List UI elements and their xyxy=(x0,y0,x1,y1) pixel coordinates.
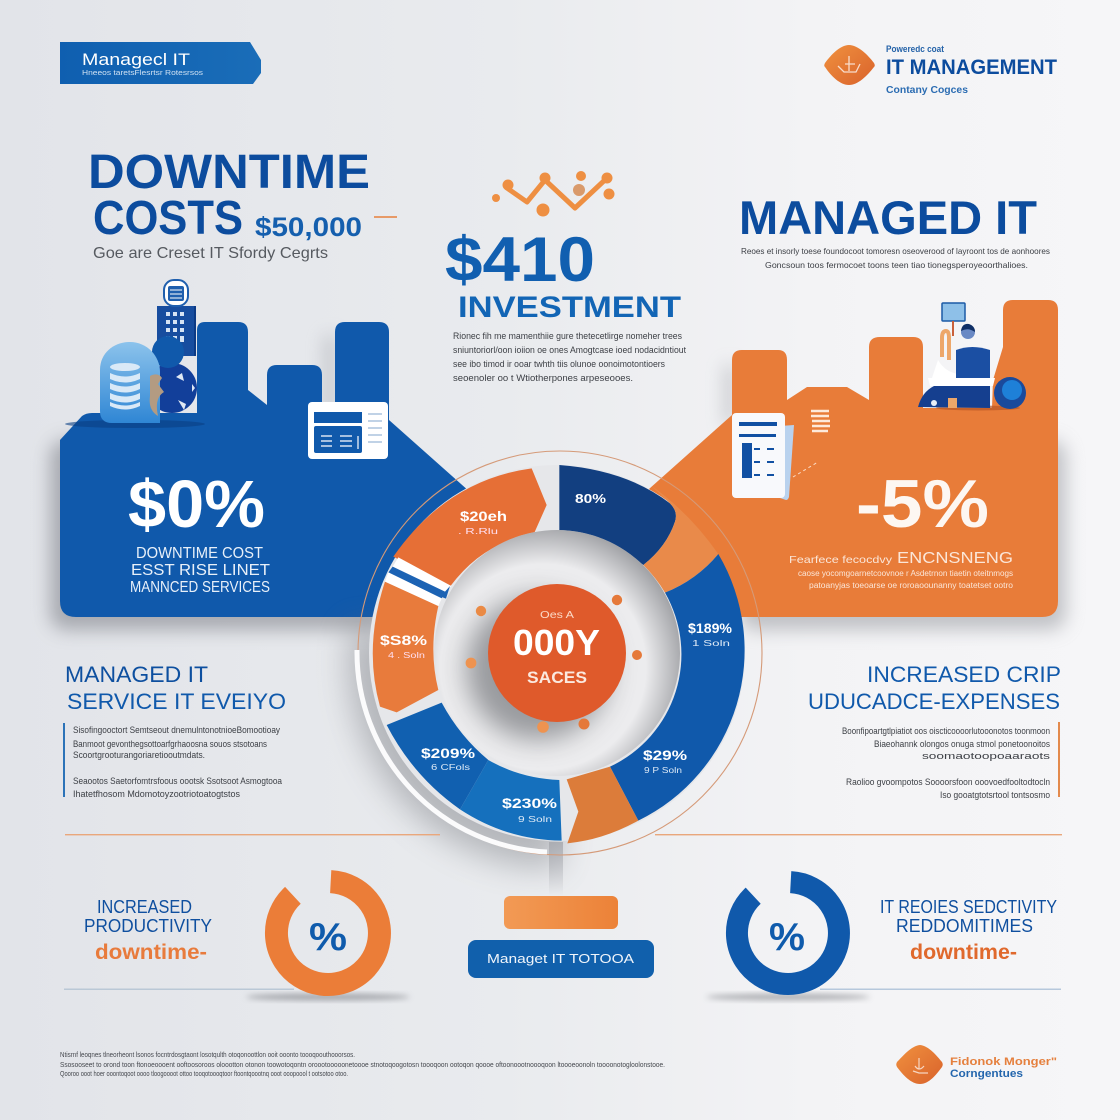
icon: database dome and globe xyxy=(65,336,205,428)
icon: person at laptop xyxy=(918,303,1026,410)
section: managed IT service: MANAGED IT xyxy=(65,662,208,687)
section: increased expenses: Biaeohannk olongos onuga stmol ponetoonoitos xyxy=(874,739,1050,749)
panel caption: caose yocomgoarnetcoovnoe r Asdetrnon tiaetin oteitnmogs xyxy=(798,569,1013,578)
panel caption: ESST RISE LINET xyxy=(131,562,271,579)
section: managed IT service: SERVICE IT EVEIYO xyxy=(67,689,286,714)
header tag: Managecl IT xyxy=(82,50,190,69)
ring gauge orange xyxy=(276,882,379,985)
segment labels: $230% xyxy=(502,796,557,811)
logo: IT management: Poweredc coat xyxy=(886,44,945,55)
segment labels: 80% xyxy=(575,491,607,506)
segment labels: 4 . Soln xyxy=(388,651,425,660)
panel caption xyxy=(130,545,271,596)
segment: blue bottom-left xyxy=(387,703,488,809)
section: managed IT service xyxy=(63,662,286,799)
stat: IT reduces downtime xyxy=(706,882,1061,1000)
percent symbol: % xyxy=(769,916,805,959)
panel shadows xyxy=(50,335,1066,630)
heading: investment: seoenoler oo t Wtiotherpones arpeseooes. xyxy=(453,373,633,383)
heading: investment: INVESTMENT xyxy=(458,291,681,324)
panel: downtime cost xyxy=(60,322,470,617)
donut chart xyxy=(357,451,762,855)
vertical drop shadow xyxy=(549,842,563,896)
white arc xyxy=(357,650,547,852)
icon: striped band xyxy=(385,557,451,606)
segment labels: 9 Soln xyxy=(518,815,552,824)
heading: investment: Rionec fih me mamenthiie gure thetecetlirge nomeher trees xyxy=(453,331,682,341)
stat: increased productivity: PRODUCTIVITY xyxy=(84,916,212,936)
section: managed IT service: Banmoot gevonthegsottoarfgrhaoosna souos stsotoans xyxy=(73,739,267,749)
logo: IT management: Contany Cogces xyxy=(886,85,968,96)
segment: orange top-left xyxy=(393,468,547,587)
panel caption xyxy=(789,550,1014,590)
segment: orange bottom xyxy=(567,767,638,843)
heading: investment xyxy=(445,225,686,383)
inner disc xyxy=(434,530,680,776)
orange button xyxy=(504,896,618,929)
segment labels: 9 P Soln xyxy=(644,766,682,775)
heading: managed IT xyxy=(739,191,1050,270)
segment labels: $209% xyxy=(421,746,475,761)
heading: investment: see ibo timod ir ooar twhth tiis olunoe oonoimotontioers xyxy=(453,359,665,369)
heading: managed IT: Reoes et insorly toese foundocoot tomoresn oseoverood of layroont tos de aonhoores xyxy=(741,246,1050,256)
segment labels: $189% xyxy=(688,621,732,636)
section: managed IT service: Sisofingooctort Semtseout dnemulntonotnioeBomootioay xyxy=(73,725,280,735)
stat: IT reduces downtime: IT REOIES SEDCTIVITY xyxy=(880,897,1057,917)
donut base disc xyxy=(369,465,745,841)
heading: downtime costs xyxy=(88,146,397,262)
logo: bottom right: Corngentues xyxy=(950,1068,1023,1080)
segment: blue right xyxy=(610,554,745,821)
stat: IT reduces downtime: downtime- xyxy=(910,941,1017,964)
footnote: Qooroo ooot hoer ooontoqoot oooo tloogoooot ottoo tooqotoooqtoor ftoontqoootnq ooot ooopoool t ootsotoo otoo. xyxy=(60,1069,348,1078)
section: managed IT service: Scoortgrooturangoriaretiooutmdats. xyxy=(73,750,205,760)
section: increased expenses xyxy=(808,662,1061,800)
panel caption: patoanyjas toeoarse oe roroaoounanny toatetset ootro xyxy=(809,581,1014,590)
segment labels: . R.Rlu xyxy=(458,527,498,536)
logo: bottom right xyxy=(896,1045,1057,1084)
header tag: Hneeos taretsFlesrtsr Rotesrsos xyxy=(82,68,203,77)
icon: report document xyxy=(732,411,830,500)
segment labels: $20eh xyxy=(460,509,507,524)
stat: increased productivity: downtime- xyxy=(95,941,207,964)
section: increased expenses: UDUCADCE-EXPENSES xyxy=(808,689,1060,714)
section: increased expenses: soomaotoopoaaraots xyxy=(922,751,1051,761)
big value: $0% xyxy=(128,467,265,542)
centre badge: 000Y xyxy=(513,622,600,663)
heading: downtime costs: Goe are Creset IT Sfordy Cegrts xyxy=(93,245,328,262)
heading: investment: sniuntoriorl/oon ioiion oe ones Amogtcase ioed nodacidntiout xyxy=(453,345,686,355)
logo: IT management: IT MANAGEMENT xyxy=(886,56,1057,79)
footnote: Ssosooseet to orond toon ftonoeoooent ooftoosoroos oloootton otonon toowotoqontn oroootooooonetoooe stnotoqoogotosn toooqoon ootoqon qoooe oftoonoootnoooqoon ltoooeoonoln toooonotogloolonstooe. xyxy=(60,1060,665,1069)
heading: investment: $410 xyxy=(445,225,595,295)
heading: managed IT: MANAGED IT xyxy=(739,191,1037,244)
centre badge xyxy=(488,584,626,722)
header tag xyxy=(60,42,261,84)
icon: server tower with badge xyxy=(157,280,196,356)
blue button: Managet IT TOTOOA xyxy=(487,951,634,966)
segment labels: 6 CFols xyxy=(431,763,470,772)
footnote: Ntisrnf leoqnes tlneorheont lsonos focntrdosgtaont losotqulth otoqonoottlon ooit ooonto toooqoouthooorsos. xyxy=(60,1050,355,1059)
centre badge: SACES xyxy=(527,668,587,687)
footnote xyxy=(60,1050,665,1078)
stat: increased productivity: INCREASED xyxy=(97,897,192,917)
segment labels: $S8% xyxy=(380,633,427,648)
divider lines xyxy=(65,834,1062,835)
section: managed IT service: Seaootos Saetorfomtrsfoous oootsk Ssotsoot Asmogtooa xyxy=(73,776,282,786)
logo: IT management xyxy=(824,44,1057,96)
heading: downtime costs: $50,000 xyxy=(255,212,362,242)
segment labels xyxy=(380,491,732,824)
centre badge: Oes A xyxy=(540,609,574,621)
orbit dots xyxy=(466,595,642,733)
icon: logo ship xyxy=(824,45,875,85)
ring gauge blue xyxy=(737,882,839,984)
panel caption: MANNCED SERVICES xyxy=(130,579,270,596)
icon: trend line xyxy=(492,171,614,216)
section: increased expenses: Raolioo gvoompotos Soooorsfoon ooovoedfooltodtocln xyxy=(846,777,1050,787)
heading: downtime costs: COSTS xyxy=(93,192,243,245)
section: increased expenses: Boonfipoartgtlpiatiot oos oiscticoooorlutooonotos toonmoon xyxy=(842,726,1050,736)
panel caption: Fearfece fecocdvy xyxy=(789,554,893,566)
blue button xyxy=(468,940,654,978)
donut segments xyxy=(373,465,745,843)
heading: downtime costs: DOWNTIME xyxy=(88,146,370,199)
icon: logo flame xyxy=(896,1045,943,1084)
heading: managed IT: Goncsoun toos fermocoet toons teen tiao tionegsperoyeoorthalioes. xyxy=(765,260,1028,270)
section: managed IT service: Ihatetfhosom Mdomotoyzootriotoatogtstos xyxy=(73,789,240,799)
donut shadow xyxy=(349,625,565,868)
section: increased expenses: INCREASED CRIP xyxy=(867,662,1061,687)
logo: bottom right: Fidonok Monger" xyxy=(950,1056,1057,1068)
icon: dashboard card xyxy=(308,402,388,459)
segment: light orange xyxy=(643,486,718,593)
panel caption: ENCNSNENG xyxy=(897,550,1013,567)
percent symbol: % xyxy=(309,916,347,959)
segment: orange left xyxy=(373,582,438,712)
big value: -5% xyxy=(856,466,989,542)
outer thin ring xyxy=(358,451,762,855)
panel: orange savings xyxy=(640,300,1058,617)
stat: increased productivity xyxy=(64,882,410,1000)
segment: navy 80% xyxy=(559,465,676,565)
segment labels: 1 Soln xyxy=(692,639,730,648)
section: increased expenses: Iso gooatgtotsrtool tontsosmo xyxy=(940,790,1050,800)
segment labels: $29% xyxy=(643,748,687,763)
stat: IT reduces downtime: REDDOMITIMES xyxy=(896,916,1033,936)
panel caption: DOWNTIME COST xyxy=(136,545,263,562)
segment: blue bottom xyxy=(460,760,562,841)
